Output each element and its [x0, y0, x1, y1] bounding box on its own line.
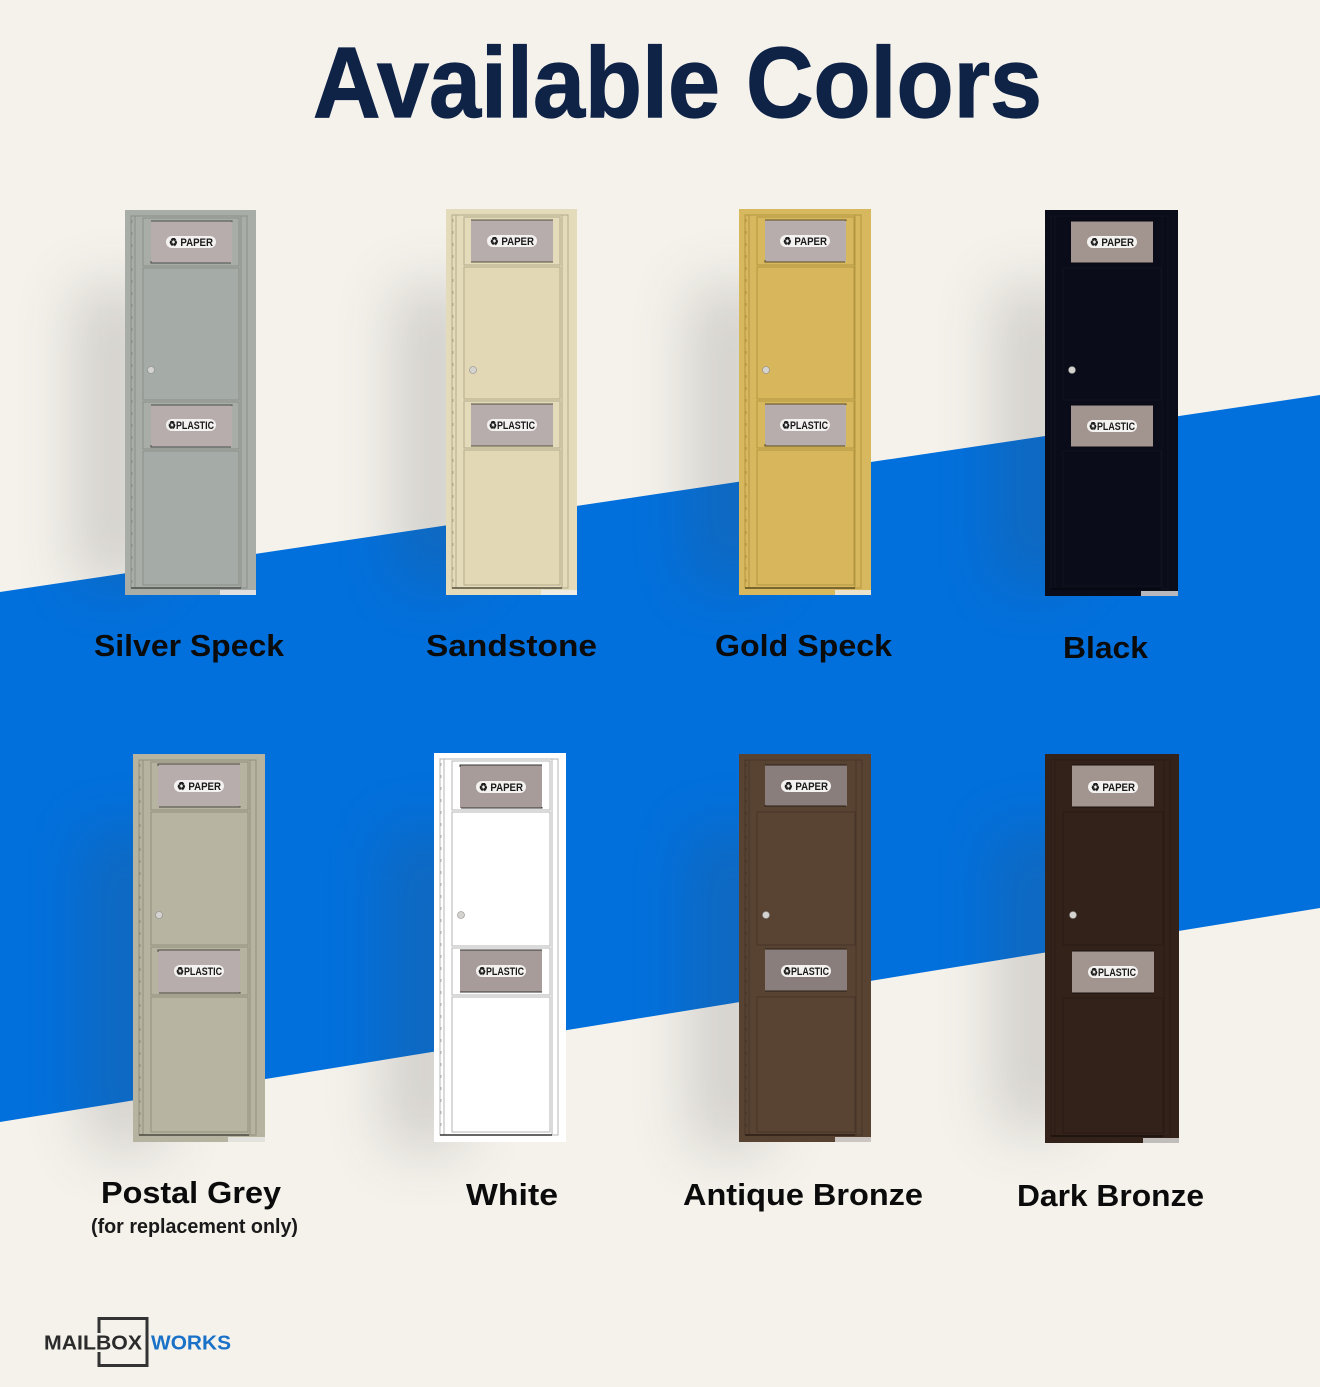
- door: Postal Grey: ♻PLASTIC: [176, 966, 222, 978]
- door: Postal Grey: ♻ PAPER: [177, 781, 221, 793]
- door: Antique Bronze: ♻PLASTIC: [783, 966, 829, 978]
- label: Gold Speck: Gold Speck: [715, 628, 893, 663]
- door shadows: [75, 285, 1075, 1150]
- title: Available Colors: [313, 27, 1042, 139]
- label: White: White: [466, 1177, 558, 1212]
- door: Gold Speck: ♻PLASTIC: [782, 420, 828, 432]
- door: Antique Bronze: ♻ PAPER: [784, 781, 828, 793]
- door: Gold Speck: [739, 209, 871, 595]
- label: Dark Bronze: Dark Bronze: [1017, 1178, 1204, 1213]
- door: Silver Speck: ♻PLASTIC: [168, 420, 214, 432]
- door: Silver Speck: ♻ PAPER: [169, 237, 213, 249]
- blue diagonal band: [0, 395, 1320, 1122]
- door: Gold Speck: ♻ PAPER: [783, 236, 827, 248]
- door: Dark Bronze: ♻PLASTIC: [1090, 967, 1136, 979]
- door: Sandstone: ♻ PAPER: [490, 236, 534, 248]
- door: White: ♻PLASTIC: [478, 966, 524, 978]
- label: Silver Speck: Silver Speck: [94, 628, 285, 663]
- door: Black: ♻ PAPER: [1090, 237, 1134, 249]
- door: White: ♻ PAPER: [479, 782, 523, 794]
- label: Sandstone: Sandstone: [426, 628, 597, 663]
- door: Black: [1045, 210, 1178, 596]
- door: Dark Bronze: [1045, 754, 1179, 1143]
- label: Black: Black: [1063, 630, 1149, 665]
- door: Sandstone: ♻PLASTIC: [489, 420, 535, 432]
- label: Postal Grey: Postal Grey: [101, 1175, 282, 1210]
- logo: Mailbox Works: [44, 1318, 231, 1366]
- door: White: [434, 753, 566, 1142]
- door: Postal Grey: [133, 754, 265, 1142]
- door: Sandstone: [446, 209, 577, 595]
- note: for replacement only: (for replacement only): [91, 1216, 298, 1238]
- label: Antique Bronze: Antique Bronze: [683, 1177, 923, 1212]
- door: Antique Bronze: [739, 754, 871, 1142]
- door: Silver Speck: [125, 210, 256, 595]
- door: Dark Bronze: ♻ PAPER: [1091, 782, 1135, 794]
- door: Black: ♻PLASTIC: [1089, 421, 1135, 433]
- logo: Mailbox Works: MAILBOX: [44, 1332, 143, 1354]
- logo: Mailbox Works: WORKS: [151, 1332, 231, 1354]
